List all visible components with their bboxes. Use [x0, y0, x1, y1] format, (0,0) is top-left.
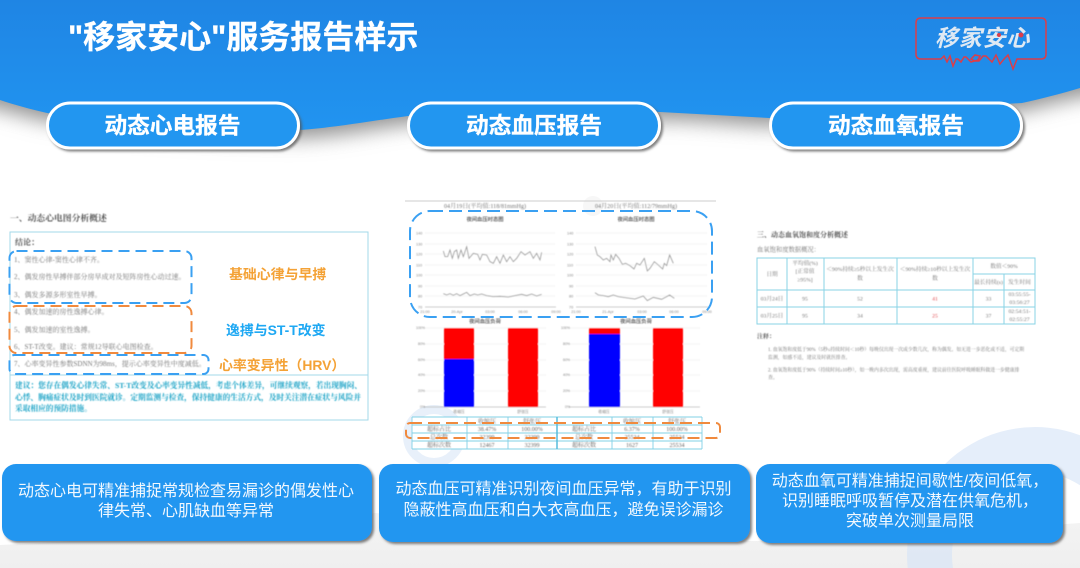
- chart: night BP line chart, 04-19: 70: [418, 306, 422, 310]
- button: 动态血压报告: [408, 103, 660, 148]
- SpO2 table: 52: [857, 296, 863, 302]
- BP load table: 总次数: [430, 433, 448, 441]
- dashed highlight: escape beats: [10, 306, 192, 353]
- button: 动态血氧报告: [770, 103, 1022, 148]
- BP date captions: [444, 202, 677, 210]
- SpO2 notes: 1. 血氧饱和度低于90%（5秒≤持续时间＜10秒）每晚仅出现一次或少数几次，称为偶发。如无进一步恶化或不适，可定期: [768, 346, 1024, 353]
- panel: blood pressure report excerpt: [405, 201, 720, 449]
- chart: night BP line chart, 04-20: 70: [569, 306, 573, 310]
- blue header banner: [0, 0, 1080, 130]
- chart: night BP line chart, 04-20: 夜间血压时态图: [617, 215, 655, 223]
- chart: night BP line chart, 04-19: [416, 215, 561, 314]
- chart: night BP line chart, 04-20: 100: [567, 274, 573, 278]
- callout: ECG: 律失常、心肌缺血等异常: [98, 502, 274, 520]
- chart: night BP load stacked bars, 04-20: 40%: [563, 373, 570, 377]
- SpO2 table: ＜90%持续≥10秒以上发生次: [900, 265, 971, 273]
- chart: night BP line chart, 04-20: 09:00: [702, 310, 712, 314]
- chart: night BP load stacked bars, 04-19: 20%: [418, 389, 425, 393]
- chart: night BP line chart, 04-19: 120: [416, 252, 422, 256]
- ECG conclusion box: [10, 232, 368, 420]
- SpO2 table: 34: [857, 314, 863, 320]
- chart: night BP load stacked bars, 04-19: 舒张压: [517, 409, 529, 414]
- chart: night BP load stacked bars, 04-19: 80%: [418, 342, 425, 346]
- BP load table: 舒张压: [523, 418, 541, 426]
- chart: night BP load stacked bars, 04-19: [416, 317, 546, 414]
- SpO2 table: 02:55:27: [1009, 317, 1030, 323]
- chart: night BP load stacked bars, 04-19: 0%: [420, 405, 425, 409]
- ECG findings text: 7、心率变异性参数SDNN为98ms，提示心率变异性中度减低。: [14, 359, 206, 369]
- SpO2 notes: [757, 332, 1024, 381]
- SpO2 table: ≥95%]: [797, 278, 813, 284]
- chart: night BP load stacked bars, 04-20: 收缩压: [598, 409, 610, 414]
- chart: night BP line chart, 04-20: 06:00: [669, 310, 679, 314]
- SpO2 table: 平均值(%): [792, 259, 818, 267]
- callout: blood oxygen: 识别睡眠呼吸暂停及潜在供氧危机，: [782, 492, 1038, 510]
- label: 心率变异性（HRV）: 心率变异性（HRV）: [219, 357, 345, 373]
- SpO2 table: 95: [802, 314, 808, 320]
- SpO2 notes: 查。: [768, 374, 778, 381]
- callout: ECG: [2, 464, 372, 541]
- BP load table: 25534: [670, 435, 684, 441]
- SpO2 table: [正常值: [796, 267, 815, 275]
- BP top rule: [405, 200, 716, 202]
- SpO2 table: 最长持续(s): [974, 278, 1003, 286]
- dashed highlight: HRV: [10, 355, 208, 374]
- ECG advice text: [15, 380, 362, 413]
- SpO2 table: 03月25日: [761, 312, 783, 320]
- ECG findings text: 1、窦性心律-窦性心律不齐。: [14, 255, 104, 264]
- chart: night BP line chart, 04-20: 130: [567, 242, 573, 246]
- chart: night BP line chart, 04-20: 21-Apr: [602, 310, 614, 314]
- chart: night BP line chart, 04-19: 09:00: [551, 310, 561, 314]
- BP load table: 25534: [670, 443, 684, 449]
- chart: night BP line chart, 04-20: 90: [569, 284, 573, 288]
- SpO2 table: ＜90%持续≥5秒以上发生次: [826, 265, 894, 273]
- BP load table: 超标次数: [427, 441, 451, 449]
- chart: night BP load stacked bars, 04-20: 100%: [561, 326, 570, 330]
- BP load table: 收缩压: [478, 418, 496, 426]
- button: 动态血压报告: 动态血压报告: [466, 112, 602, 138]
- chart: night BP load stacked bars, 04-20: 0%: [565, 405, 570, 409]
- callout: ECG: 动态心电可精准捕捉常规检查易漏诊的偶发性心: [18, 482, 354, 500]
- chart: night BP line chart, 04-19: 90: [418, 284, 422, 288]
- chart: night BP line chart, 04-20: 120: [567, 252, 573, 256]
- button: 动态心电报告: 动态心电报告: [104, 112, 241, 138]
- SpO2 table: 日期: [766, 270, 778, 278]
- SpO2 table: 95: [802, 296, 808, 302]
- chart: night BP line chart, 04-19: 100: [416, 274, 422, 278]
- ECG findings text: 2、偶发房性早搏伴部分房早成对及短阵房性心动过速。: [14, 272, 186, 281]
- SpO2 notes: 监测，如感不适，建议及时就医排查。: [768, 354, 850, 361]
- label: 基础心律与早搏: 基础心律与早搏: [229, 266, 326, 282]
- BP load table: 100.00%: [521, 427, 543, 433]
- BP load table: 舒张压: [668, 418, 686, 426]
- chart: night BP load stacked bars, 04-20: 80%: [563, 342, 570, 346]
- BP date captions: 04月20日(平均值:112/79mmHg): [595, 202, 677, 210]
- chart: night BP line chart, 04-19: 21:00: [420, 310, 430, 314]
- BP load table: 1627: [626, 443, 638, 449]
- SpO2 notes: 注释：: [757, 332, 775, 340]
- ECG findings text: 结论：: [15, 237, 39, 247]
- ECG advice text: 建议：您存在偶发心律失常、ST-T改变及心率变异性减低，考虑个体差异，可继续观察，若出现胸闷、: [15, 380, 362, 391]
- chart: night BP line chart, 04-20: 21:00: [571, 310, 581, 314]
- chart: night BP line chart, 04-20: 03:00: [637, 310, 647, 314]
- chart: night BP line chart, 04-19: 80: [418, 294, 422, 298]
- chart: night BP load stacked bars, 04-19: 收缩压: [453, 409, 465, 414]
- callout: blood oxygen: 动态血氧可精准捕捉间歇性/夜间低氧，: [772, 472, 1048, 490]
- chart: night BP load stacked bars, 04-19: 夜间血压负荷: [469, 317, 502, 325]
- BP load table: 32399: [480, 435, 494, 441]
- panel: blood oxygen report excerpt: [757, 230, 1035, 381]
- chart: night BP line chart, 04-20: 140: [567, 232, 573, 236]
- chart: night BP load stacked bars, 04-19: 40%: [418, 373, 425, 377]
- callout: blood pressure: 动态血压可精准识别夜间血压异常，有助于识别: [395, 480, 732, 498]
- SpO2 table: 03:56:27: [1009, 300, 1030, 306]
- SpO2 table: 41: [932, 296, 938, 302]
- chart: night BP load stacked bars, 04-20: 夜间血压负荷: [620, 317, 653, 325]
- BP load table: [412, 417, 702, 449]
- chart: night BP load stacked bars, 04-19: 100%: [416, 326, 425, 330]
- chart: night BP line chart, 04-20: 80: [569, 294, 573, 298]
- logo: [916, 18, 1046, 69]
- BP load table: 6.37%: [624, 427, 640, 433]
- chart: night BP line chart, 04-20: 110: [567, 264, 573, 268]
- BP load table: 25534: [624, 435, 640, 441]
- callout: blood oxygen: [756, 464, 1063, 543]
- chart: night BP line chart, 04-19: 140: [416, 232, 422, 236]
- BP load table: 超标次数: [572, 441, 596, 449]
- chart: night BP line chart, 04-20: [567, 215, 712, 314]
- ECG advice text: 采取相应的预防措施。: [15, 403, 92, 413]
- chart: night BP load stacked bars, 04-20: 60%: [563, 358, 570, 362]
- chart: night BP line chart, 04-19: 03:00: [485, 310, 495, 314]
- ECG findings text: 3、偶发多源多形室性早搏。: [14, 290, 102, 299]
- SpO2 table: 03:55:55-: [1008, 292, 1031, 298]
- chart: night BP line chart, 04-19: 06:00: [518, 310, 528, 314]
- chart: night BP load stacked bars, 04-20: 20%: [563, 389, 570, 393]
- callout: blood oxygen: 突破单次测量局限: [846, 512, 974, 530]
- SpO2 notes: 2. 血氧饱和度低于90%（持续时间≥10秒），如一晚内多次出现，需高度重视，建议前往医院呼吸睡眠科做进一步健康排: [768, 366, 1019, 374]
- ECG findings text: 6、ST-T改变。建议：常规12导联心电图检查。: [14, 342, 158, 351]
- BP load table: 超标占比: [427, 425, 451, 433]
- chart: night BP line chart, 04-19: 20-Apr: [451, 310, 463, 314]
- panel: ECG report excerpt: [10, 212, 368, 420]
- BP load table: 总次数: [575, 433, 593, 441]
- SpO2 table: [757, 258, 1035, 324]
- button: 动态心电报告: [48, 103, 298, 148]
- SpO2 table: 02:54:51-: [1008, 309, 1031, 315]
- SpO2 table: 33: [986, 296, 992, 302]
- ECG advice text: 心悸、胸痛症状及时到医院就诊。定期监测与检查，保持健康的生活方式，及时关注潜在症状与风险并: [15, 392, 361, 403]
- ECG heading: 一、动态心电图分析概述: [10, 212, 108, 223]
- chart: night BP line chart, 04-19: 夜间血压时态图: [466, 215, 504, 223]
- chart: night BP line chart, 04-19: 130: [416, 242, 422, 246]
- ECG findings text: 4、偶发加速的房性逸搏心律。: [14, 307, 108, 316]
- SpO2 table: 数: [932, 274, 938, 282]
- SpO2 heading: 三、动态血氧饱和度分析概述: [757, 230, 849, 239]
- callout: blood pressure: [379, 464, 750, 542]
- SpO2 table: 发生时间: [1008, 278, 1031, 286]
- logo: 移家安心: [935, 25, 1030, 51]
- ECG findings text: 5、偶发加速的室性逸搏。: [14, 325, 94, 334]
- label: 逸搏与ST-T改变: 逸搏与ST-T改变: [226, 322, 326, 338]
- BP date captions: 04月19日(平均值:118/81mmHg): [444, 202, 526, 210]
- BP load table: 12467: [480, 443, 494, 449]
- SpO2 table: 25: [932, 314, 938, 320]
- BP load table: 32399: [524, 435, 540, 441]
- chart: night BP load stacked bars, 04-20: [561, 317, 700, 414]
- chart: night BP load stacked bars, 04-19: 60%: [418, 358, 425, 362]
- ECG findings text: [14, 237, 206, 369]
- dashed highlight: table rows: [406, 423, 720, 438]
- title: "移家安心"服务报告样示: [68, 19, 418, 55]
- SpO2 table: 03月24日: [761, 294, 783, 302]
- BP load table: 32399: [524, 443, 540, 449]
- dashed highlight: basic rhythm: [10, 251, 192, 303]
- BP load table: 38.47%: [478, 427, 496, 433]
- chart: night BP line chart, 04-19: 110: [416, 264, 422, 268]
- SpO2 table: 37: [986, 314, 992, 320]
- BP load table: 100.00%: [666, 427, 688, 433]
- button: 动态血氧报告: 动态血氧报告: [828, 112, 964, 138]
- callout: blood pressure: 隐蔽性高血压和白大衣高血压，避免误诊漏诊: [403, 501, 724, 519]
- SpO2 table: 数: [857, 274, 863, 282]
- dashed highlight: line charts: [410, 211, 712, 317]
- SpO2 table: 数值＜90%: [990, 262, 1018, 270]
- BP load table: 收缩压: [623, 418, 641, 426]
- SpO2 subheading: 血氧饱和度数据概况：: [757, 244, 820, 254]
- chart: night BP load stacked bars, 04-20: 舒张压: [662, 409, 674, 414]
- BP load table: 超标占比: [572, 425, 596, 433]
